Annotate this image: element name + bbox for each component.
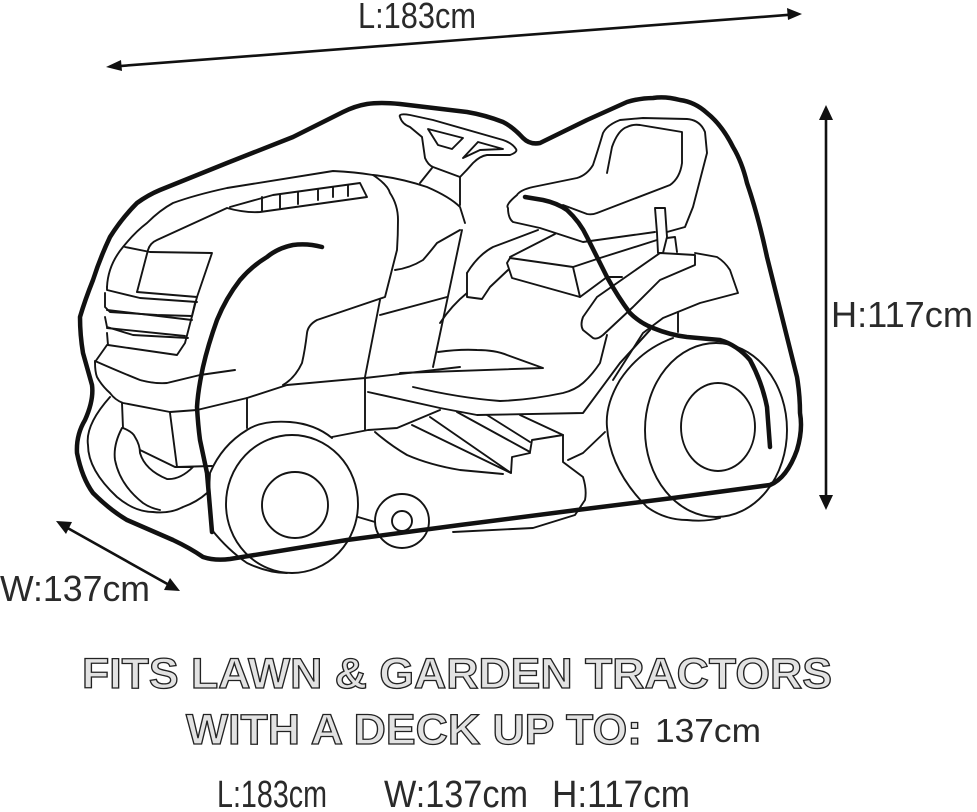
width label: W:137cm <box>0 568 150 609</box>
heading line two: WITH A DECK UP TO: <box>186 706 642 754</box>
steering wheel <box>400 114 516 205</box>
length arrow <box>106 8 802 71</box>
rear wheel <box>607 330 787 521</box>
battery box and floor <box>467 230 622 299</box>
deck wheel <box>358 494 429 548</box>
cover rear seam <box>525 197 770 447</box>
cover left seam <box>197 244 322 532</box>
seat <box>507 118 707 258</box>
cover outline <box>77 97 801 560</box>
dimensions summary <box>217 774 690 812</box>
rear fender and lever <box>413 208 738 401</box>
height label: H:117cm <box>831 294 973 335</box>
heading line one: FITS LAWN & GARDEN TRACTORS <box>82 650 832 698</box>
front wheel <box>209 422 358 573</box>
deck size: 137cm <box>655 712 761 749</box>
height arrow <box>819 105 833 510</box>
mower deck and steps <box>332 330 650 532</box>
tractor illustration <box>77 97 801 573</box>
hood and body <box>95 171 543 430</box>
front left wheel <box>88 345 212 512</box>
width arrow <box>56 521 180 591</box>
